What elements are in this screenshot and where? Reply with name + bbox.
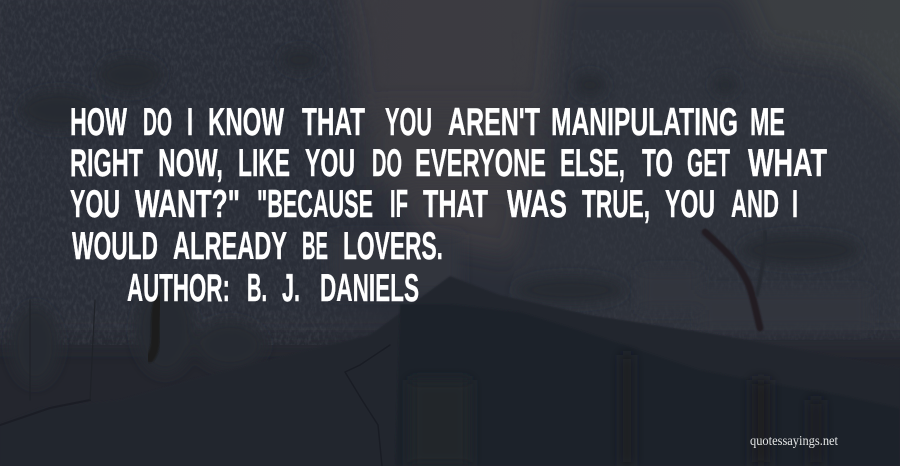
author line: DANIELS <box>320 267 419 310</box>
pale snow patches <box>330 235 870 330</box>
quote line 2: YOU <box>305 142 355 185</box>
quote line 1 <box>70 101 785 144</box>
quote line 2: NOW, <box>158 142 223 185</box>
quote line 4: WOULD <box>72 225 158 268</box>
quote line 3: AND <box>731 183 779 226</box>
textured tree detail <box>0 0 900 345</box>
reflection streaks <box>410 355 822 466</box>
author line <box>127 267 419 310</box>
quote line 3: WANT?" <box>135 183 240 226</box>
quote line 3: WAS <box>507 183 567 226</box>
quote line 1: THAT <box>302 101 365 144</box>
quote line 1: YOU <box>385 101 432 144</box>
sky <box>0 0 900 330</box>
quote line 3: IF <box>390 183 408 226</box>
quote line 1: I <box>187 101 193 144</box>
quote line 2: EVERYONE <box>415 142 546 185</box>
quote line 2: DO <box>372 142 402 185</box>
quote line 2: GET <box>687 142 730 185</box>
quote line 4: ALREADY <box>173 225 287 268</box>
quote line 2 <box>70 142 827 185</box>
author line: J. <box>282 267 300 310</box>
water reflection <box>395 304 900 466</box>
quote line 3: TRUE, <box>582 183 650 226</box>
watermark: quotessayings.net <box>750 434 838 449</box>
quote line 3: YOU <box>70 183 120 226</box>
quote line 1: AREN'T <box>448 101 540 144</box>
author line: AUTHOR: <box>127 267 230 310</box>
quote line 1: KNOW <box>208 101 284 144</box>
quote line 2: WHAT <box>748 142 827 185</box>
author line: B. <box>247 267 267 310</box>
foliage shadows <box>10 48 860 385</box>
quote line 2: RIGHT <box>70 142 143 185</box>
quote line 3: "BECAUSE <box>257 183 373 226</box>
quote line 2: LIKE <box>238 142 290 185</box>
quote line 3 <box>70 183 798 226</box>
quote line 2: ELSE, <box>560 142 625 185</box>
quote line 1: DO <box>143 101 172 144</box>
distant tree masses <box>0 0 900 340</box>
quote line 2: TO <box>642 142 673 185</box>
quote line 1: MANIPULATING <box>551 101 738 144</box>
quote line 3: I <box>792 183 798 226</box>
quote line 1: HOW <box>70 101 127 144</box>
quote line 3: THAT <box>423 183 488 226</box>
far snow bank <box>0 276 900 466</box>
quote line 3: YOU <box>665 183 715 226</box>
quote text <box>70 101 827 310</box>
quote line 4: LOVERS. <box>343 225 443 268</box>
quote line 4: BE <box>302 225 328 268</box>
quote line 4 <box>72 225 443 268</box>
quote line 1: ME <box>750 101 785 144</box>
tree trunks and creek <box>0 232 765 466</box>
